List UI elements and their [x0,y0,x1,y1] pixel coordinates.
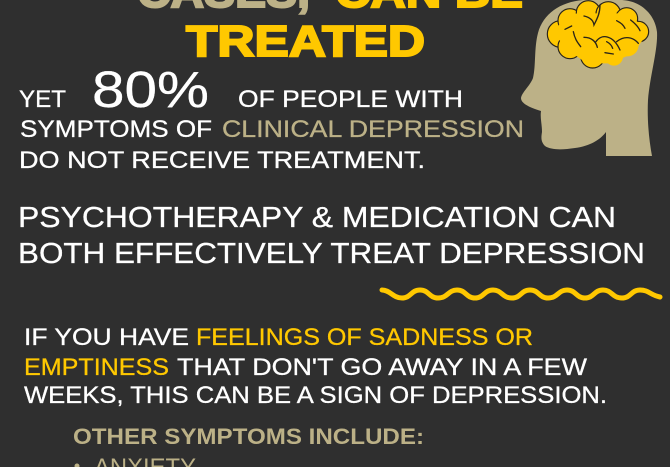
icon: head with brain [521,0,657,156]
text block: 80 percent statistic: 80% [92,61,209,118]
head silhouette [521,0,657,156]
brain [547,1,649,68]
text block: treatment statement: PSYCHOTHERAPY & MEDICATION CAN [18,202,616,234]
text block: treatment statement [18,202,645,270]
text block: signs of depression: WEEKS, THIS CAN BE A SIGN OF DEPRESSION. [24,382,607,409]
text block: signs of depression: FEELINGS OF SADNESS OR [196,324,533,351]
text block: 80 percent statistic: YET [19,86,66,113]
title: TREATED [186,17,425,66]
text block: 80 percent statistic: OF PEOPLE WITH [238,86,463,113]
text block: 80 percent statistic [19,61,524,174]
text block: signs of depression: EMPTINESS [24,354,169,381]
heading: other symptoms: OTHER SYMPTOMS INCLUDE: [73,424,424,449]
title [137,0,523,66]
text block: signs of depression: THAT DON'T GO AWAY IN A FEW [177,354,587,381]
text block: treatment statement: BOTH EFFECTIVELY TREAT DEPRESSION [18,238,645,270]
text block: 80 percent statistic: CLINICAL DEPRESSION [222,116,524,143]
text block: 80 percent statistic: DO NOT RECEIVE TREATMENT. [19,147,425,174]
wavy divider [382,290,660,298]
text block: signs of depression: IF YOU HAVE [24,324,189,351]
text block: signs of depression [24,324,607,409]
text block: 80 percent statistic: SYMPTOMS OF [20,116,212,143]
